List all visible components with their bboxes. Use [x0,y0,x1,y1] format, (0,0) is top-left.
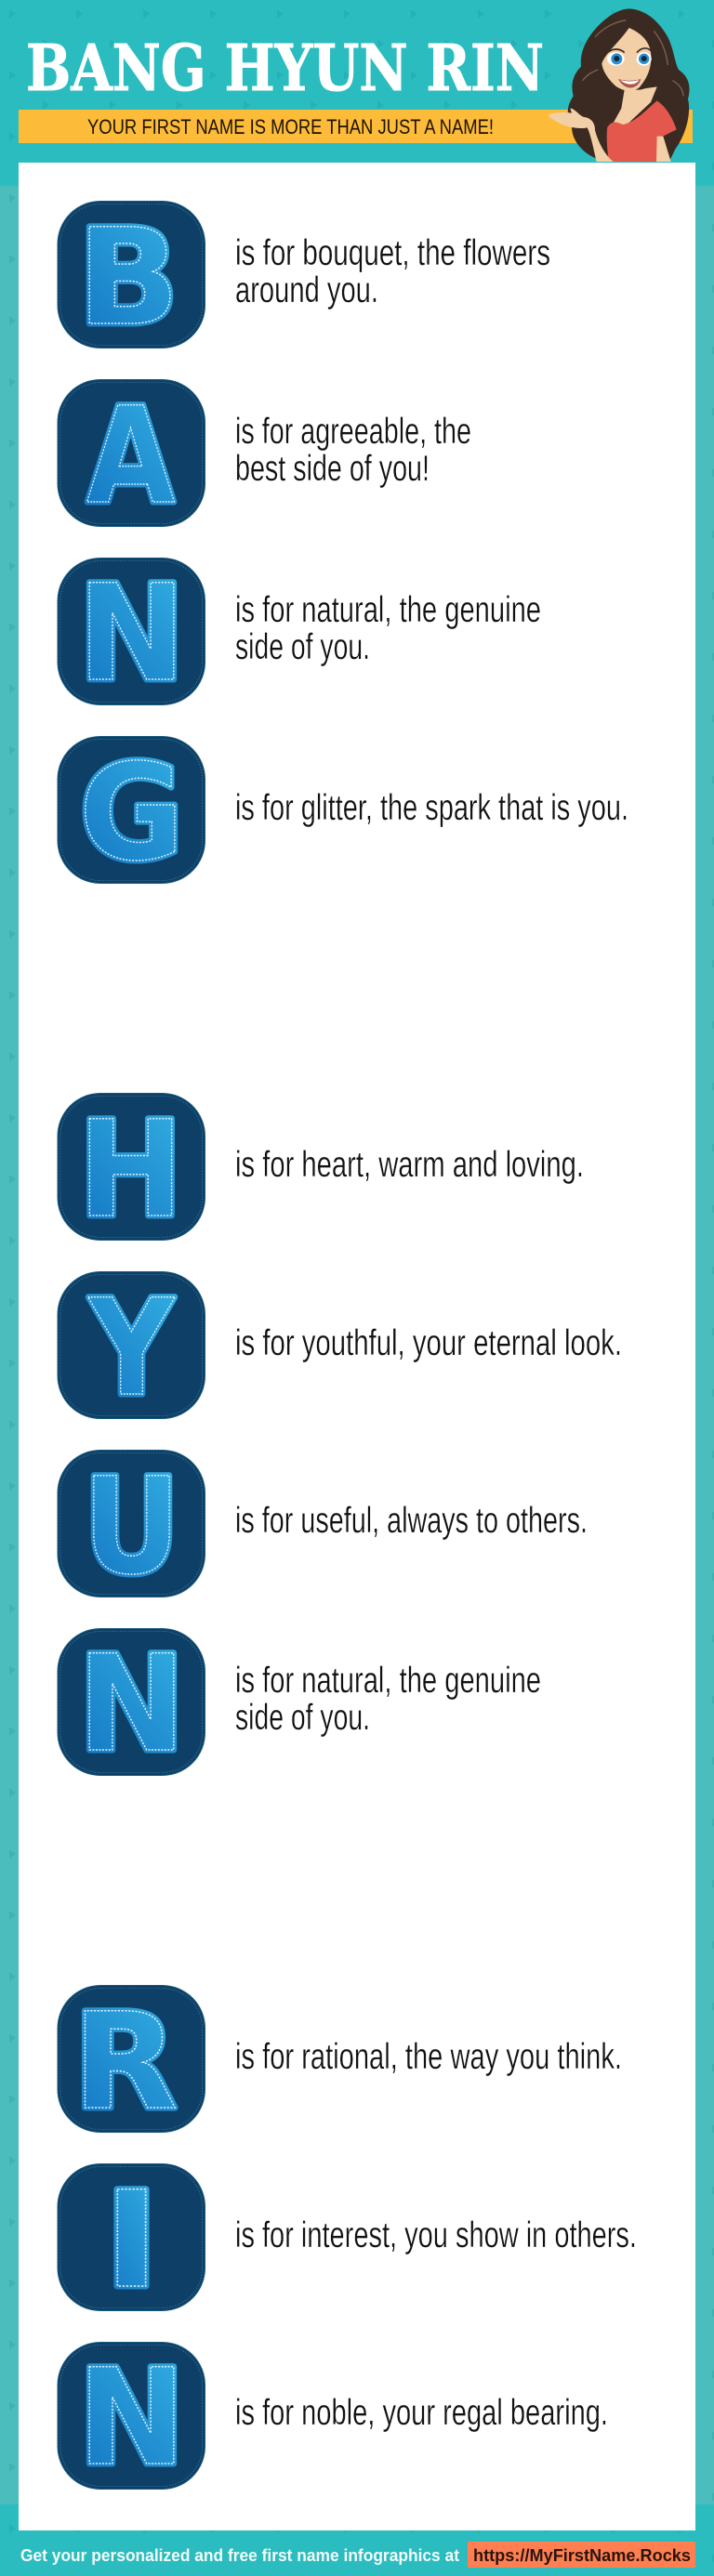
row: B [58,200,550,355]
icon: letter I: I [104,2162,160,2318]
icon: letter N: N [78,1626,186,1781]
text: N meaning [235,590,541,667]
icon: letter B [58,200,205,355]
footer [20,2542,695,2568]
icon: letter N: N [78,556,186,711]
text: U meaning: is for useful, always to others. [235,1501,588,1541]
text: A meaning: best side of you! [235,449,430,489]
text: H meaning: is for heart, warm and loving. [235,1145,584,1185]
icon: letter U: U [83,1449,180,1604]
footer link badge: https://MyFirstName.Rocks [473,2546,691,2565]
icon: letter N: N [78,2340,186,2495]
text: N meaning: is for natural, the genuine [235,590,541,630]
icon: letter N: N [78,2340,186,2495]
text: N meaning: is for natural, the genuine [235,1661,541,1701]
footer link badge [468,2542,695,2568]
icon: letter A [58,378,205,533]
icon: letter I: I [104,2162,160,2318]
icon: letter Y: Y [87,1270,175,1426]
row: G [58,735,628,890]
icon: letter N: N [78,556,186,711]
icon: letter N: N [78,1626,186,1781]
icon: letter I [58,2162,205,2318]
icon: letter R: R [73,1984,178,2139]
icon: letter R: R [73,1984,178,2139]
icon: letter H: H [78,1092,183,1247]
text: A meaning: is for agreeable, the [235,412,471,452]
row: U [58,1449,588,1604]
icon: letter G: G [79,735,184,890]
row: Y [58,1270,622,1426]
text: B meaning: is for bouquet, the flowers [235,233,550,273]
row: A [58,378,471,533]
text: N meaning: side of you. [235,1698,370,1738]
icon: letter Y [58,1270,205,1426]
icon: letter B: B [77,200,179,355]
icon: letter A: A [86,378,175,533]
icon: letter R [58,1984,205,2139]
icon: letter H: H [78,1092,183,1247]
row: N [58,556,541,711]
text: N meaning [235,1661,541,1738]
row: N second [58,1626,541,1781]
text: N meaning: side of you. [235,627,370,667]
banner: subtitle [19,110,693,143]
title: BANG HYUN RIN [26,32,544,106]
icon: letter G: G [79,735,184,890]
row: N third [58,2340,608,2495]
icon: cartoon woman [549,8,690,162]
text: B meaning: around you. [235,270,378,310]
text: B meaning [235,233,550,310]
icon: letter B: B [77,200,179,355]
banner: subtitle: YOUR FIRST NAME IS MORE THAN JUST A NAME! [87,115,494,138]
icon: letter A: A [86,378,175,533]
row: I [58,2162,637,2318]
row: H [58,1092,584,1247]
icon: letter Y: Y [87,1270,175,1426]
icon: letter U: U [83,1449,180,1604]
footer text: Get your personalized and free first name infographics at [20,2546,459,2565]
text: A meaning [235,412,471,489]
row: R [58,1984,622,2139]
